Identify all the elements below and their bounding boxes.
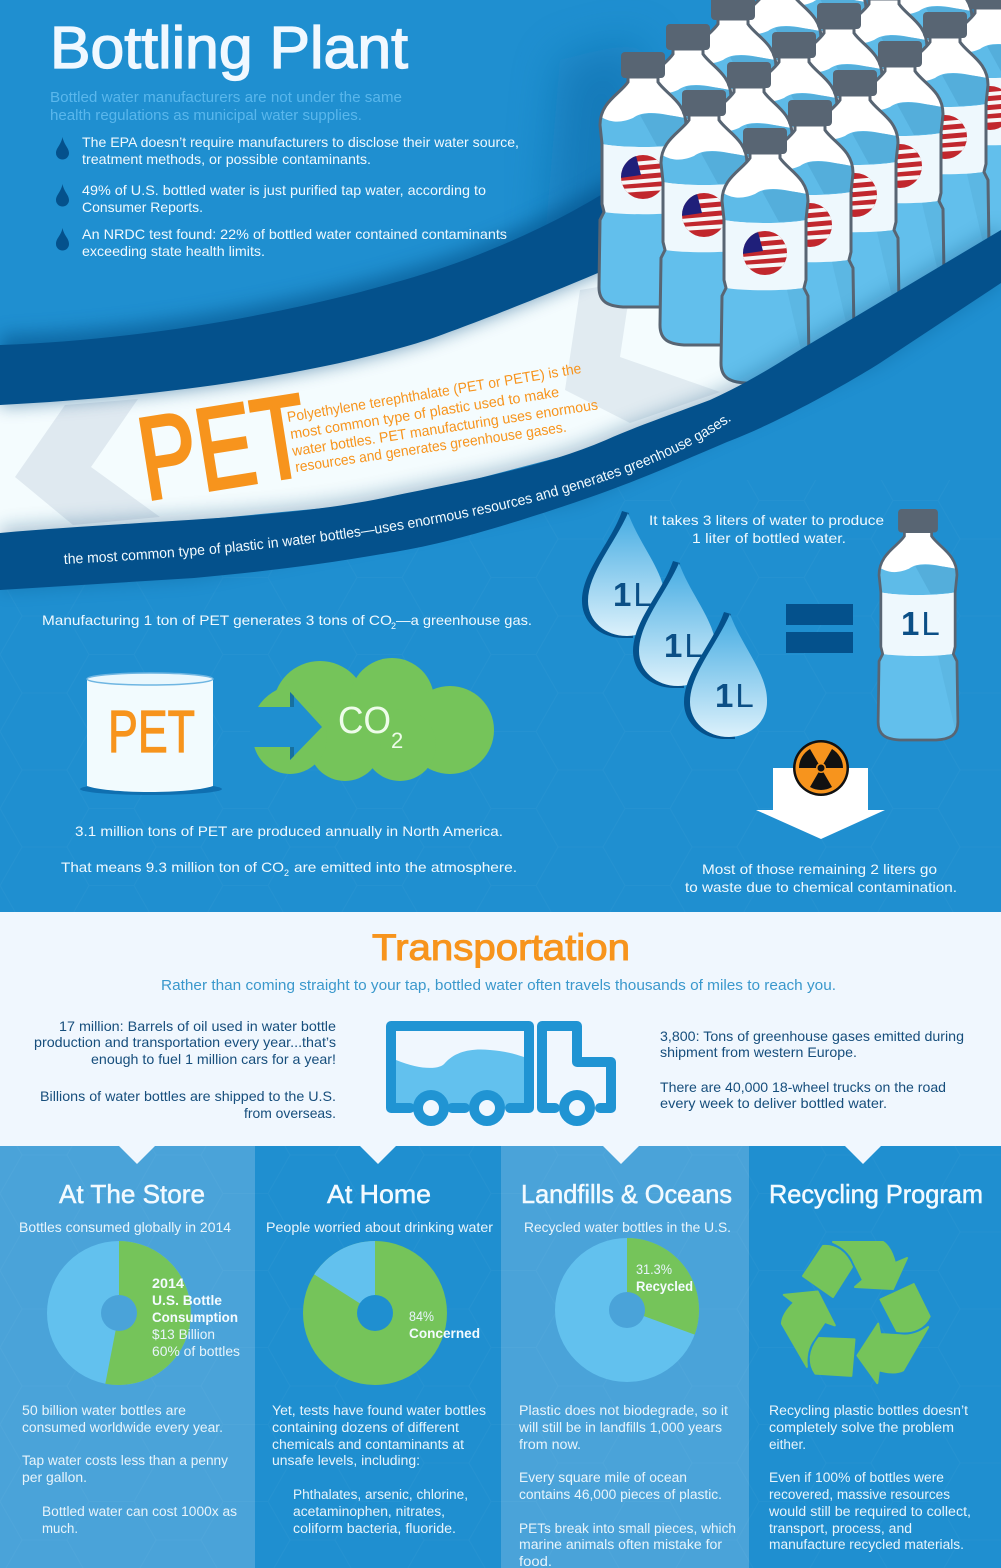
notch	[603, 1146, 639, 1164]
water statement: 1 liter of bottled water.	[692, 530, 846, 546]
pie labels: 60% of bottles	[152, 1344, 240, 1359]
body text: containing dozens of different	[272, 1420, 459, 1435]
body text: recovered, massive resources	[769, 1487, 950, 1502]
top navy swoosh	[0, 170, 640, 405]
body text: Tap water costs less than a penny	[22, 1453, 228, 1468]
pie labels: U.S. Bottle	[152, 1293, 222, 1308]
body text: 50 billion water bottles are	[22, 1403, 186, 1418]
panel: recycling program	[749, 1146, 1001, 1568]
heading: At Home	[327, 1179, 431, 1209]
pie labels	[636, 1262, 693, 1294]
body text: will still be in landfills 1,000 years	[518, 1420, 722, 1435]
subheading: Rather than coming straight to your tap, bottled water often travels thousands of miles to reach you.	[161, 977, 836, 994]
bullet text: exceeding state health limits.	[82, 243, 265, 259]
water statement	[649, 512, 884, 546]
icon: recycling arrows	[770, 1242, 943, 1393]
pie labels: 84%	[409, 1309, 434, 1324]
pie labels: Consumption	[152, 1310, 238, 1325]
pet description: most common type of plastic used to make	[289, 385, 560, 443]
icon: water drop	[56, 184, 69, 206]
waste statement: to waste due to chemical contamination.	[685, 879, 957, 895]
bullet text: treatment methods, or possible contaminants.	[82, 151, 371, 167]
pet description	[286, 361, 599, 476]
chart caption: Bottles consumed globally in 2014	[19, 1219, 231, 1235]
left facts: 17 million: Barrels of oil used in water bottle	[59, 1018, 336, 1034]
body text: contains 46,000 pieces of plastic.	[519, 1487, 722, 1502]
lower ribbon shadow	[0, 224, 1001, 590]
pet production stats: 2	[284, 868, 289, 878]
drop 1	[582, 511, 665, 638]
shade behind bottles	[540, 40, 660, 300]
left facts: Billions of water bottles are shipped to the U.S.	[40, 1088, 336, 1104]
left facts: enough to fuel 1 million cars for a year!	[91, 1051, 336, 1067]
subtitle: health regulations as municipal water supplies.	[50, 107, 362, 124]
subtitle: Bottled water manufacturers are not under the same	[50, 89, 402, 106]
body text: either.	[769, 1437, 806, 1452]
waste statement	[685, 861, 957, 895]
right facts: shipment from western Europe.	[660, 1044, 857, 1060]
chart caption: Recycled water bottles in the U.S.	[524, 1219, 731, 1235]
right facts	[660, 1028, 964, 1111]
pie chart: recycled	[555, 1238, 699, 1382]
left facts: production and transportation every year...that’s	[34, 1034, 336, 1050]
pet description: Polyethylene terephthalate (PET or PETE) is the	[286, 361, 583, 426]
pet description: water bottles. PET manufacturing uses enormous	[290, 397, 599, 460]
co2 statement	[42, 612, 532, 631]
panel: at the store	[0, 1146, 255, 1568]
body text: Yet, tests have found water bottles	[272, 1403, 486, 1418]
pet description: resources and generates greenhouse gases.	[294, 420, 568, 476]
chevron right	[565, 280, 720, 423]
subtitle	[50, 89, 402, 124]
pie labels: 2014	[152, 1276, 185, 1291]
pet production stats: are emitted into the atmosphere.	[294, 859, 517, 875]
body text: Even if 100% of bottles were	[769, 1470, 944, 1485]
left facts: from overseas.	[244, 1105, 336, 1121]
body text: completely solve the problem	[769, 1420, 954, 1435]
pet logo: PET	[129, 369, 316, 525]
bullet text: 49% of U.S. bottled water is just purified tap water, according to	[82, 182, 486, 198]
icon: co2 cloud with arrow: 2	[391, 728, 403, 753]
body text: coliform bacteria, fluoride.	[293, 1521, 456, 1536]
icon: pet barrel: PET	[108, 699, 195, 765]
title: Bottling Plant	[50, 15, 408, 81]
drop 2: 1L	[664, 627, 703, 664]
heading: Recycling Program	[769, 1179, 983, 1209]
body text: unsafe levels, including:	[272, 1453, 420, 1468]
heading: At The Store	[59, 1179, 205, 1209]
panel: transportation	[0, 912, 1001, 1146]
pet production stats	[61, 823, 517, 878]
icon: one liter bottle: 1L	[901, 605, 940, 642]
icon: water drop	[56, 137, 69, 160]
arrow down	[756, 768, 885, 839]
icon: radiation hazard	[793, 740, 849, 796]
icon: three water drops	[582, 511, 767, 739]
body text: transport, process, and	[769, 1521, 912, 1536]
body text: marine animals often mistake for	[519, 1537, 723, 1552]
notch	[119, 1146, 155, 1164]
pie labels: $13 Billion	[152, 1327, 215, 1342]
pie labels	[152, 1276, 240, 1359]
body text: chemicals and contaminants at	[272, 1437, 464, 1452]
body text: PETs break into small pieces, which	[519, 1521, 736, 1536]
bullet text: An NRDC test found: 22% of bottled water contained contaminants	[82, 226, 507, 242]
drop 1: 1L	[613, 576, 652, 613]
chart caption: People worried about drinking water	[266, 1219, 493, 1235]
co2 statement: 2	[391, 621, 396, 631]
bottles: rows of water bottles	[599, 0, 1001, 383]
right facts: 3,800: Tons of greenhouse gases emitted during	[660, 1028, 964, 1044]
right facts: There are 40,000 18-wheel trucks on the road	[660, 1079, 946, 1095]
bullet text	[82, 134, 519, 259]
pie labels: Concerned	[409, 1326, 480, 1341]
bullet text: The EPA doesn’t require manufacturers to disclose their water source,	[82, 134, 519, 150]
pet production stats: That means 9.3 million ton of CO	[61, 859, 284, 875]
pie chart: concerned	[303, 1241, 447, 1385]
right facts: every week to deliver bottled water.	[660, 1095, 887, 1111]
pie labels	[409, 1309, 480, 1341]
notch	[360, 1146, 396, 1164]
water statement: It takes 3 liters of water to produce	[649, 512, 884, 528]
body text: much.	[42, 1521, 78, 1536]
body text: Plastic does not biodegrade, so it	[519, 1403, 728, 1418]
chevron left	[15, 399, 160, 525]
body text	[22, 1403, 237, 1536]
body text: manufacture recycled materials.	[769, 1537, 964, 1552]
icon: truck	[391, 1026, 611, 1121]
pet production stats: 3.1 million tons of PET are produced annually in North America.	[75, 823, 503, 839]
icon: water drop	[56, 228, 69, 251]
icon: co2 cloud with arrow	[250, 658, 494, 781]
body text: acetaminophen, nitrates,	[293, 1504, 445, 1519]
pie chart: 2014 consumption	[47, 1241, 191, 1385]
body text: would still be required to collect,	[768, 1504, 971, 1519]
co2 statement: —a greenhouse gas.	[396, 612, 532, 628]
lower navy ribbon	[0, 230, 1001, 590]
body text	[768, 1403, 971, 1552]
equals sign	[786, 604, 853, 653]
drop 3	[684, 612, 767, 739]
panel: at home	[255, 1146, 501, 1568]
hexagon texture	[0, 480, 1001, 912]
left facts	[34, 1018, 336, 1121]
pie labels: 31.3%	[636, 1262, 672, 1277]
body text: per gallon.	[22, 1470, 87, 1485]
drop 3: 1L	[715, 677, 754, 714]
co2 statement: Manufacturing 1 ton of PET generates 3 tons of CO	[42, 612, 392, 628]
waste statement: Most of those remaining 2 liters go	[702, 861, 937, 877]
body text: Phthalates, arsenic, chlorine,	[293, 1487, 468, 1502]
body text: Recycling plastic bottles doesn’t	[769, 1403, 968, 1418]
body text: Bottled water can cost 1000x as	[42, 1504, 237, 1519]
banner: pet white ribbon	[0, 180, 1001, 538]
body text	[518, 1403, 736, 1568]
icon: one liter bottle	[878, 509, 958, 740]
body text: Every square mile of ocean	[519, 1470, 687, 1485]
icon: co2 cloud with arrow: CO	[338, 700, 391, 742]
bullet list	[56, 134, 519, 259]
heading: Transportation	[372, 927, 630, 968]
panel: landfills and oceans	[501, 1146, 749, 1568]
heading: Landfills & Oceans	[521, 1179, 732, 1209]
body text	[272, 1403, 486, 1536]
body text: from now.	[519, 1437, 581, 1452]
icon: pet barrel	[80, 673, 222, 795]
drop 2	[633, 561, 716, 688]
bullet text: Consumer Reports.	[82, 199, 203, 215]
pie labels: Recycled	[636, 1279, 693, 1294]
ribbon caption: the most common type of plastic in water bottles—uses enormous resources and generates greenhouse gases.	[64, 417, 731, 564]
notch	[845, 1146, 881, 1164]
body text: consumed worldwide every year.	[22, 1420, 223, 1435]
top navy swoosh shadow	[0, 160, 640, 405]
